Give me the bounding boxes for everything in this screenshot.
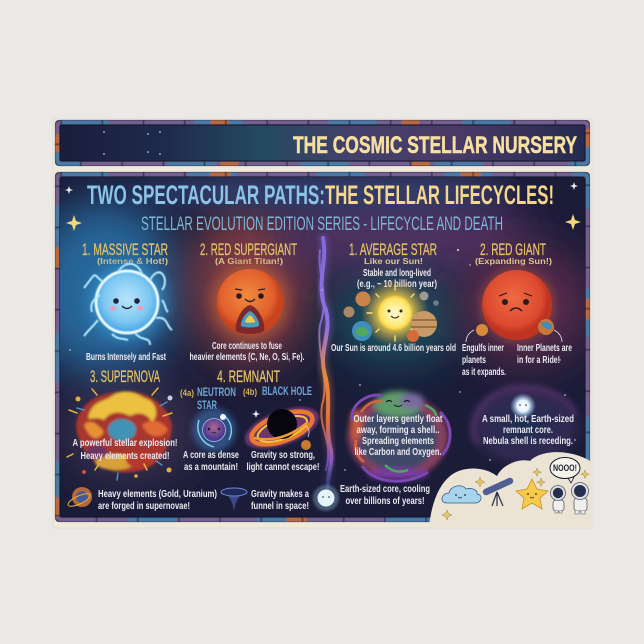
description (357, 268, 437, 290)
caption (183, 450, 239, 473)
section: supernova (67, 367, 178, 480)
footnote: earth-sized core (313, 484, 430, 511)
section: average star (331, 240, 456, 354)
caption: Outer layers gently float (354, 414, 443, 425)
label: 2 red giant: 2. RED GIANT (480, 240, 546, 259)
description: Stable and long-lived (363, 268, 431, 279)
caption (246, 450, 320, 473)
caption (482, 414, 574, 447)
caption: A small, hot, Earth-sized (482, 414, 574, 425)
icon: astronauts (550, 482, 588, 514)
speech bubble: nooo (550, 458, 580, 483)
label: 4a neutron star: STAR (197, 398, 217, 412)
speech bubble: nooo: NOOO! (553, 463, 577, 473)
text (98, 489, 217, 512)
caption: Our Sun is around 4.6 billion years old (331, 343, 456, 354)
caption (354, 414, 443, 458)
caption: like Carbon and Oxygen. (354, 447, 442, 458)
caption: Spreading elements (362, 436, 434, 447)
text: over billions of years! (346, 496, 424, 507)
text (340, 484, 430, 507)
text: Earth-sized core, cooling (340, 484, 430, 495)
section: red supergiant (190, 240, 305, 363)
label: 1 average star: 1. AVERAGE STAR (349, 240, 437, 259)
section: red giant (462, 240, 572, 378)
section: remnant (180, 367, 324, 473)
text: funnel in space! (251, 501, 309, 512)
sublabel: intense and hot: (Intense & Hot!) (97, 256, 168, 266)
label: 4b black hole: (4b) (243, 387, 257, 397)
icon: neutron star (192, 408, 236, 452)
sublabel: expanding sun: (Expanding Sun!) (475, 256, 552, 266)
icon: sparkles (65, 182, 581, 231)
caption: inner planets: in for a Ride! (517, 355, 560, 366)
section: massive star (75, 240, 179, 363)
panel: cream corner with mascots (429, 452, 592, 528)
text: Gravity makes a (251, 489, 309, 500)
icon: nebula cloud (348, 391, 450, 481)
caption: heavier elements (C, Ne, O, Si, Fe). (190, 352, 305, 363)
text: Heavy elements (Gold, Uranium) (98, 489, 217, 500)
postcard (53, 119, 592, 528)
label: 4 remnant: 4. REMNANT (217, 367, 280, 386)
caption: inner planets (517, 343, 572, 366)
label: 4a neutron star: NEUTRON (197, 385, 236, 399)
description: (e.g., ~ 10 billion year) (357, 279, 437, 290)
icon: cloud (442, 486, 481, 503)
caption: Nebula shell is receding. (483, 436, 573, 447)
label: 4a neutron star: (4a) (180, 388, 194, 398)
icon: tiny sparkles (442, 468, 589, 520)
label: 2 red supergiant: 2. RED SUPERGIANT (200, 240, 297, 259)
center lightning divider (319, 238, 331, 488)
caption: inner planets: Inner Planets are (517, 343, 572, 354)
label: 4a neutron star (180, 385, 236, 412)
caption (190, 341, 305, 363)
caption: remnant core. (503, 425, 553, 436)
icon: supernova explosion (67, 388, 172, 480)
text: are forged in supernovae! (98, 501, 190, 512)
icon: gravity funnel (221, 488, 247, 511)
section: planetary nebula (348, 391, 450, 481)
caption: Gravity so strong, (251, 450, 315, 461)
icon: blue massive star (75, 250, 179, 354)
icon: telescope (486, 481, 510, 506)
scattered stars (69, 249, 576, 471)
text (251, 489, 309, 512)
footnote: heavy elements (66, 487, 217, 512)
panel: header banner (55, 120, 590, 166)
label: 4b black hole: BLACK HOLE (262, 384, 312, 398)
section: white dwarf (463, 379, 587, 471)
caption (72, 438, 178, 462)
icon: red supergiant with core (200, 252, 300, 352)
icon: cooling core (313, 485, 339, 511)
label: 1 massive star: 1. MASSIVE STAR (82, 240, 168, 259)
heading: TWO SPECTACULAR PATHS: (87, 180, 325, 210)
icon: smiling star (516, 479, 548, 509)
caption: as a mountain! (184, 462, 238, 473)
label: 4b black hole (243, 384, 312, 398)
label: 3 supernova: 3. SUPERNOVA (90, 367, 160, 386)
icon: forged ring (66, 487, 92, 509)
panel: main stellar lifecycles (30, 172, 590, 522)
icon: red giant with planets (466, 260, 562, 350)
caption: engulfs: Engulfs inner (462, 343, 504, 354)
icon: white dwarf in nebula shell (463, 379, 587, 471)
caption: engulfs (462, 343, 506, 378)
icon: black hole (240, 399, 324, 457)
caption: engulfs: planets (462, 355, 486, 366)
caption: engulfs: as it expands. (462, 367, 506, 378)
caption: Burns Intensely and Fast (86, 352, 166, 363)
caption: Core continues to fuse (212, 341, 282, 352)
sublabel: a giant titan: (A Giant Titan!) (215, 256, 283, 266)
caption: A powerful stellar explosion! (72, 438, 178, 449)
caption: light cannot escape! (246, 462, 320, 473)
icon: sun with planets (344, 279, 439, 347)
sublabel: like our sun: Like our Sun! (364, 256, 423, 266)
footnote: gravity funnel (221, 488, 309, 512)
caption: A core as dense (183, 450, 239, 461)
caption: Heavy elements created! (80, 451, 170, 462)
caption: away, forming a shell.. (356, 425, 440, 436)
